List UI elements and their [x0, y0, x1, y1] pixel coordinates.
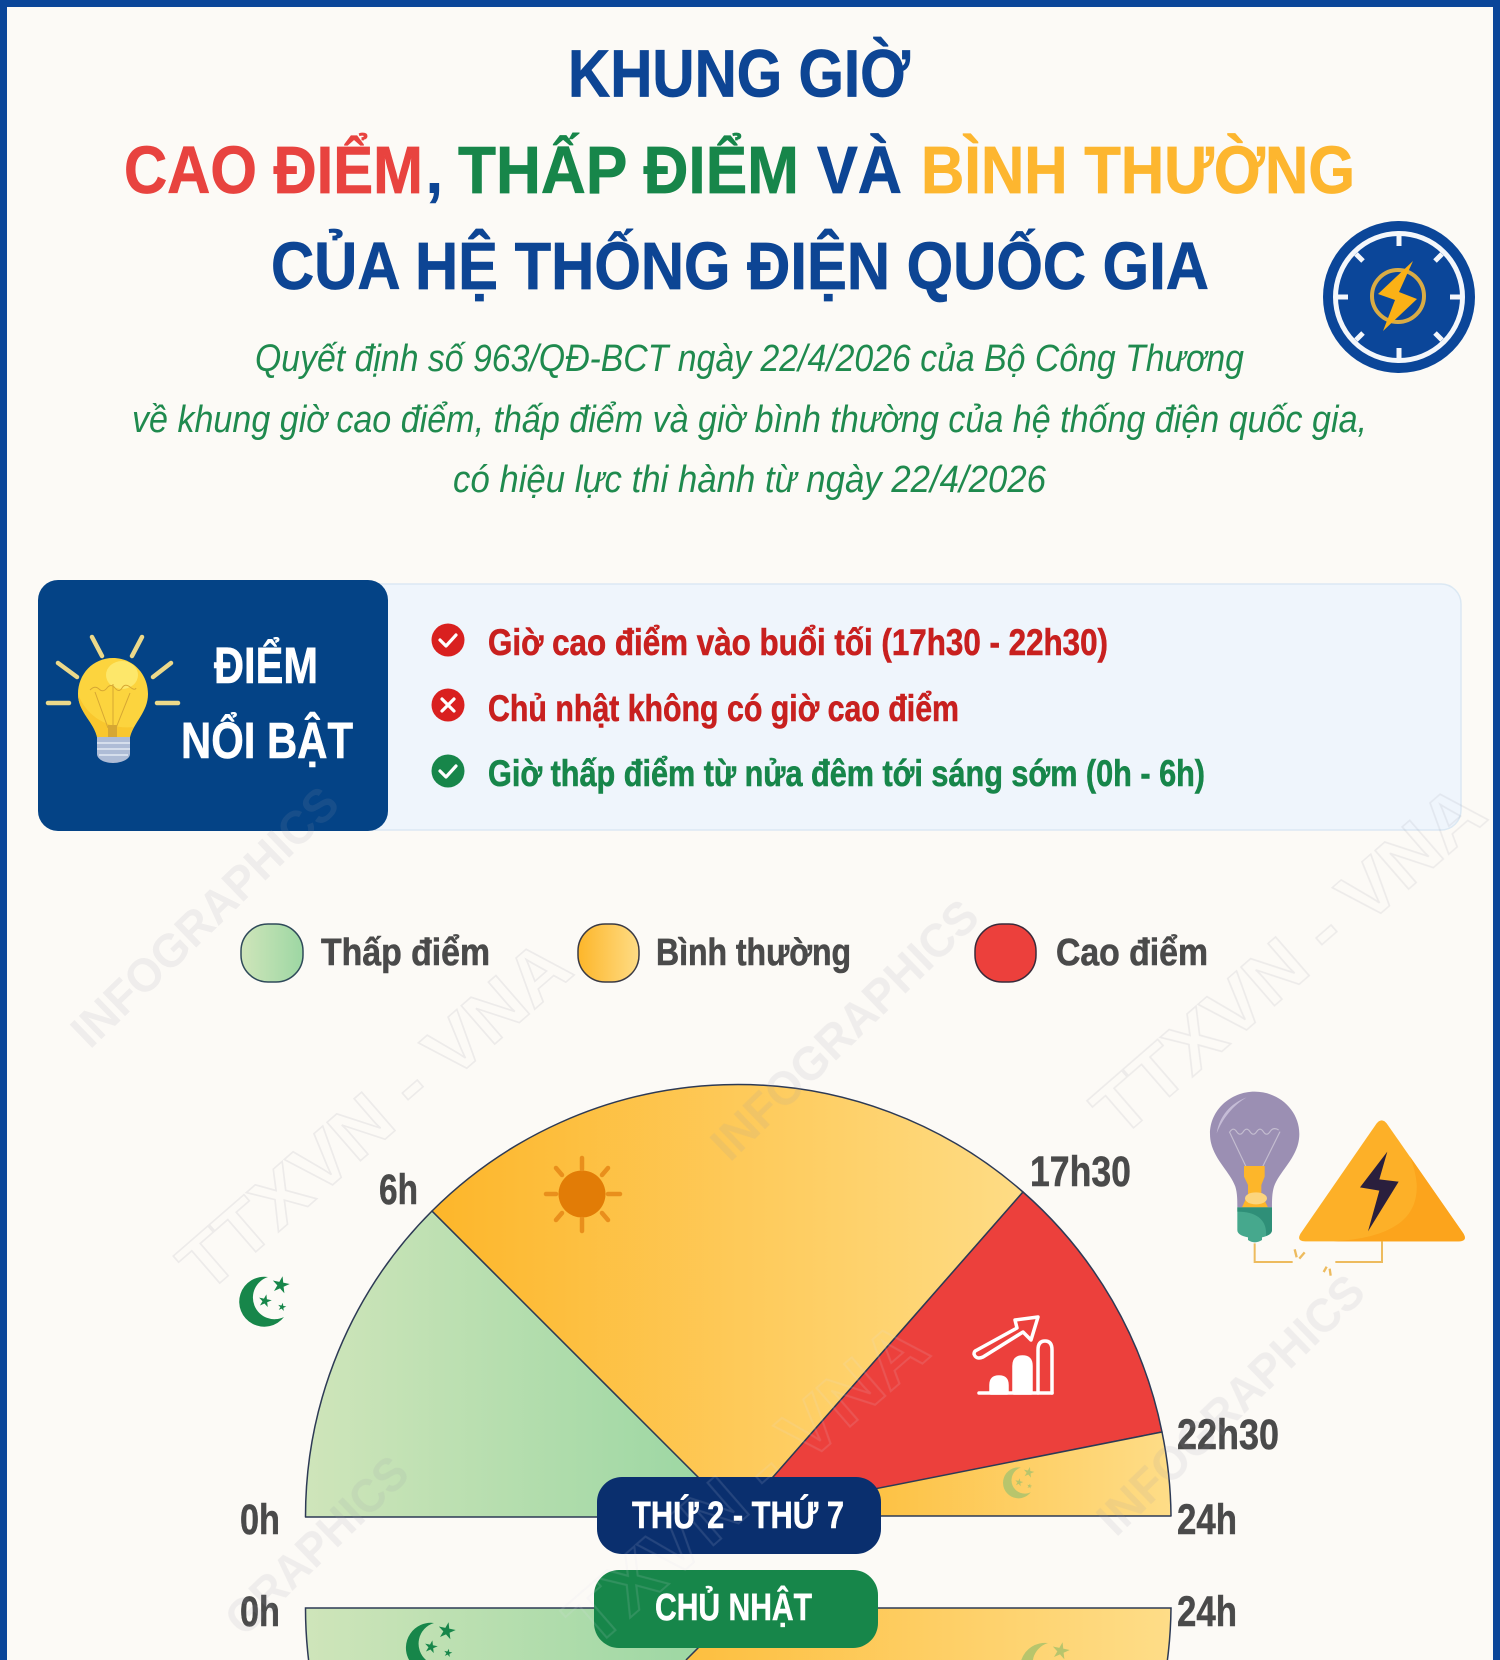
label: 6h: 6h [379, 1166, 418, 1214]
label: sunday 24h: 24h [1177, 1588, 1237, 1636]
highlight: off-peak hours: Giờ thấp điểm từ nửa đêm tới sáng sớm (0h - 6h) [488, 753, 1205, 794]
icon: rising bar chart arrow [974, 1317, 1052, 1393]
title line 3: CỦA HỆ THỐNG ĐIỆN QUỐC GIA [271, 228, 1209, 304]
icon: red cross [432, 688, 464, 722]
chart: sunday half circle [305, 1608, 1171, 1660]
watermarks [60, 768, 1500, 1660]
watermarks: TTXVN - VNA [1076, 768, 1500, 1152]
legend label: peak: Cao điểm [1056, 932, 1208, 974]
label: 17h30: 17h30 [1030, 1148, 1131, 1196]
icon: moon and stars, sunday left [406, 1620, 457, 1660]
label: 0h: 0h [240, 1496, 280, 1544]
chart: monday to saturday half circle [305, 1085, 1171, 1517]
icon: moon and stars, small [1003, 1466, 1035, 1498]
icon: red check [432, 624, 464, 656]
watermarks: GRAPHICS [214, 1445, 419, 1645]
title [124, 36, 1355, 304]
warning triangle [1299, 1120, 1465, 1241]
title line 1: KHUNG GIỜ [568, 36, 911, 112]
title comma: , [425, 133, 444, 208]
subtitle line 2: về khung giờ cao điểm, thấp điểm và giờ bình thường của hệ thống điện quốc gia, [132, 399, 1367, 441]
icon: moon and stars, green [239, 1274, 291, 1327]
legend swatch: peak [975, 924, 1036, 982]
subtitle line 1: Quyết định số 963/QĐ-BCT ngày 22/4/2026 của Bộ Công Thương [255, 338, 1244, 380]
icon: moon and stars, sunday right [1021, 1640, 1071, 1660]
label: 22h30: 22h30 [1177, 1411, 1279, 1459]
segment: normal 6h-17h30 [432, 1085, 1023, 1517]
highlight: sunday: Chủ nhật không có giờ cao điểm [488, 688, 959, 729]
panel: highlights [38, 580, 1461, 831]
segment: sunday off-peak [305, 1608, 738, 1660]
title line 2: bình thường: BÌNH THƯỜNG [921, 133, 1355, 208]
title line 2: cao điểm: CAO ĐIỂM [124, 133, 423, 208]
pill: monday to saturday: THỨ 2 - THỨ 7 [632, 1493, 844, 1537]
heading line 1: ĐIỂM [214, 636, 318, 694]
watermarks: TXVN - VNA [549, 1304, 943, 1660]
segment: off-peak 0h-6h [305, 1211, 738, 1517]
segment: peak 17h30-22h30 [738, 1192, 1162, 1517]
segment: sunday normal [686, 1608, 1171, 1660]
legend [241, 924, 1208, 982]
time labels [240, 1148, 1279, 1636]
watermarks: INFOGRAPHICS [60, 776, 349, 1057]
legend swatch: off-peak [241, 924, 303, 982]
label: sunday 0h: 0h [240, 1588, 280, 1636]
wires [1255, 1241, 1382, 1262]
icon: light bulb [48, 637, 178, 763]
title line 2: thấp điểm: THẤP ĐIỂM [458, 133, 799, 208]
highlights heading box [38, 580, 388, 831]
watermarks: TTXVN - VNA [162, 923, 586, 1307]
icon: clock with lightning bolt [1323, 221, 1475, 373]
title line 2: và: VÀ [817, 133, 902, 208]
heading line 2: NỔI BẬT [181, 711, 353, 769]
icon: bulb and warning triangle [1210, 1092, 1465, 1276]
label: 24h: 24h [1177, 1496, 1237, 1544]
pill: monday to saturday [597, 1477, 881, 1554]
highlight: peak hours: Giờ cao điểm vào buổi tối (17h30 - 22h30) [488, 622, 1108, 663]
highlights background [340, 584, 1461, 830]
icon: sun [546, 1158, 620, 1231]
segment: normal 22h30-24h [738, 1432, 1171, 1516]
bulb glass [1210, 1092, 1299, 1207]
pill: sunday: CHỦ NHẬT [655, 1585, 812, 1629]
legend label: off-peak: Thấp điểm [321, 932, 490, 974]
heading: điểm nổi bật [181, 636, 353, 769]
watermarks: INFOGRAPHICS [700, 889, 989, 1170]
pill: sunday [594, 1570, 878, 1648]
subtitle line 3: có hiệu lực thi hành từ ngày 22/4/2026 [453, 459, 1047, 501]
legend swatch: normal [578, 924, 639, 982]
watermarks: INFOGRAPHICS [1086, 1264, 1375, 1545]
subtitle [132, 338, 1367, 501]
legend label: normal: Bình thường [656, 932, 851, 974]
icon: green check [432, 754, 464, 788]
